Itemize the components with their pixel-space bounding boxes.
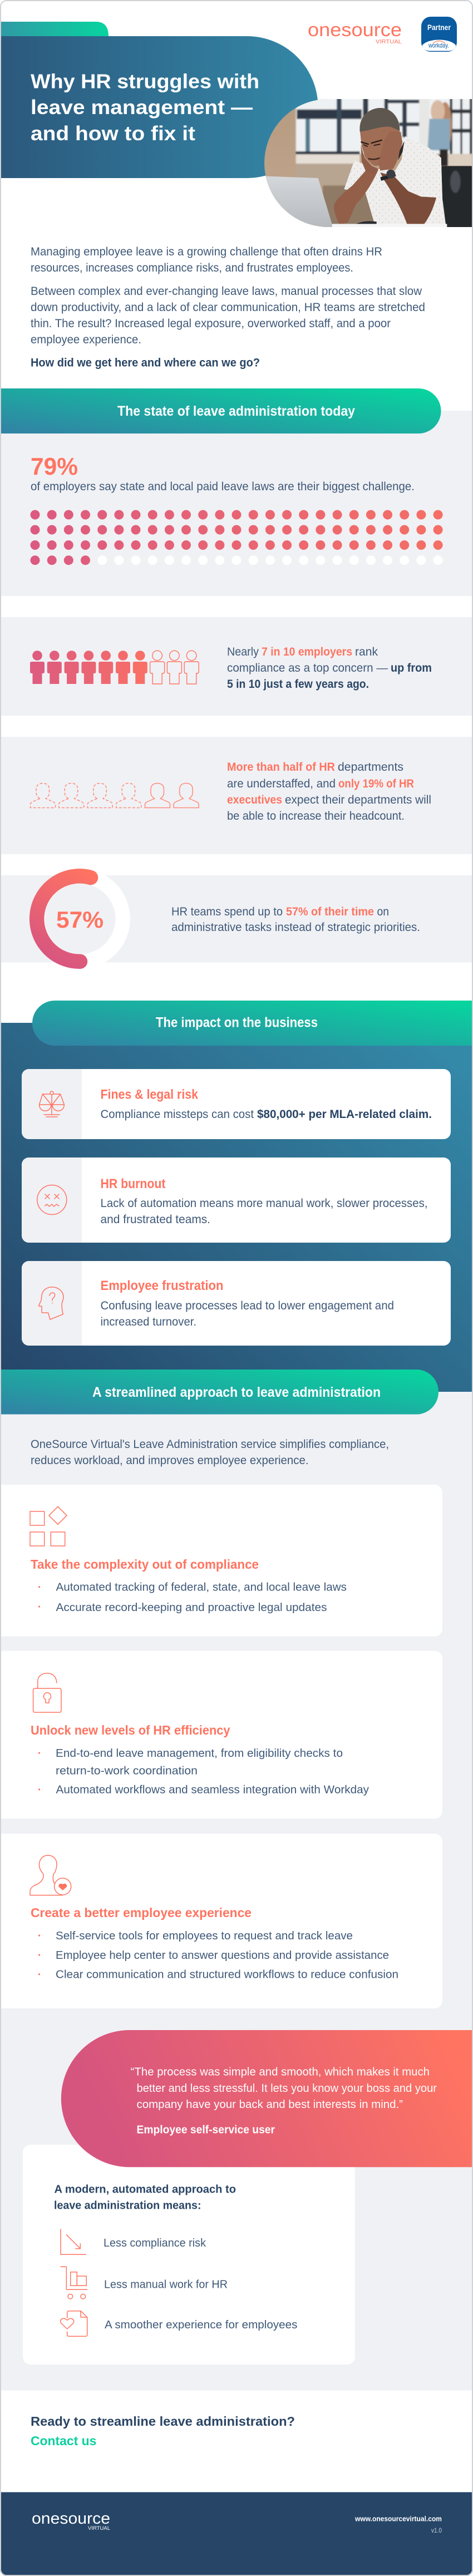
footer xyxy=(0,2492,473,2576)
banner: streamlined approach xyxy=(0,1370,438,1415)
card: unlock HR efficiency: Unlock new levels of HR efficiency xyxy=(31,1723,230,1737)
donut chart: 57%: 57% xyxy=(56,907,104,933)
bullet list: return-to-work coordination xyxy=(56,1765,198,1777)
intro text: down productivity, and a lack of clear communication, HR teams are stretched xyxy=(31,301,425,314)
intro text: How did we get here and where can we go? xyxy=(31,356,260,370)
footer logo: onesource xyxy=(32,2510,110,2528)
pictogram: 7 of 10 people xyxy=(30,651,199,684)
card: fines and legal risk: $80,000+ per MLA-related claim. xyxy=(257,1107,432,1121)
text: compliance concern: compliance as a top concern — xyxy=(227,661,388,674)
card: HR burnout: HR burnout xyxy=(100,1176,166,1191)
callout: employee quote: “The process was simple and smooth, which makes it much xyxy=(131,2066,430,2078)
banner: state of leave administration xyxy=(0,388,441,434)
text: admin time: administrative tasks instead of strategic priorities. xyxy=(171,920,420,934)
pictogram: six people outlines xyxy=(30,784,199,808)
footer url: v1.0 xyxy=(431,2526,442,2534)
card: fines and legal risk: Compliance missteps can cost xyxy=(100,1107,254,1121)
bullet list: Automated tracking of federal, state, and local leave laws xyxy=(56,1580,347,1594)
bullet list xyxy=(38,1580,347,1614)
callout: employee quote: company have your back and best interests in mind.” xyxy=(137,2099,403,2111)
icon: document with heart xyxy=(61,2311,87,2336)
icon: cart with boxes xyxy=(61,2267,87,2299)
intro text: employee experience. xyxy=(31,333,141,346)
panel: 57% admin time xyxy=(0,875,473,963)
text: compliance concern: 5 in 10 just a few years ago. xyxy=(227,677,369,691)
card: fines and legal risk: Fines & legal risk xyxy=(100,1087,199,1102)
intro text: Managing employee leave is a growing challenge that often drains HR xyxy=(31,245,382,258)
text: understaffed: expect their departments will xyxy=(285,793,431,806)
card: HR burnout xyxy=(22,1158,451,1243)
footer url xyxy=(354,2515,442,2534)
card: take the complexity out of compliance xyxy=(0,1485,442,1637)
footer url: www.onesourcevirtual.com xyxy=(354,2515,442,2523)
card: better employee experience xyxy=(0,1834,442,2008)
text: compliance concern: up from xyxy=(391,661,432,674)
bullet list: Clear communication and structured workflows to reduce confusion xyxy=(56,1968,398,1981)
intro text xyxy=(31,245,425,370)
card: HR burnout: Lack of automation means more manual work, slower processes, xyxy=(100,1196,427,1210)
title: leave management — xyxy=(31,96,253,119)
icon: person with heart xyxy=(30,1855,71,1895)
bullet list xyxy=(38,1747,369,1796)
card: fines and legal risk xyxy=(22,1069,451,1139)
header: green tab xyxy=(0,22,109,36)
text: admin time xyxy=(171,905,420,934)
bullet list: Automated workflows and seamless integration with Workday xyxy=(56,1783,369,1796)
text: compliance concern xyxy=(227,645,432,691)
panel: impact on the business xyxy=(0,1001,473,1392)
intro: leave administration service: reduces workload, and improves employee experience. xyxy=(31,1454,308,1467)
panel: understaffed HR departments xyxy=(0,737,473,854)
card: better employee experience: Create a better employee experience xyxy=(31,1905,252,1920)
bullet list: Employee help center to answer questions and provide assistance xyxy=(56,1949,389,1962)
banner: impact: The impact on the business xyxy=(156,1015,318,1031)
text: compliance concern: 7 in 10 employers xyxy=(262,645,352,658)
bullet list: Self-service tools for employees to request and track leave xyxy=(56,1929,353,1942)
text: compliance concern: rank xyxy=(355,645,378,658)
text: understaffed xyxy=(227,760,431,822)
intro text: thin. The result? Increased legal exposure, overworked staff, and a poor xyxy=(31,317,391,330)
card: employee frustration: Confusing leave processes lead to lower engagement and xyxy=(100,1299,394,1312)
icon: squares and diamond xyxy=(30,1506,67,1546)
icon: tired face xyxy=(37,1185,67,1214)
text: admin time: on xyxy=(377,905,389,918)
card: modern automated approach xyxy=(23,2145,355,2365)
text: understaffed: executives xyxy=(227,793,282,806)
heading xyxy=(54,2183,236,2211)
donut chart: 57% xyxy=(37,876,123,962)
badge: workday partner: workday. xyxy=(428,41,449,49)
icon: open padlock xyxy=(33,1673,61,1712)
icon: head with question mark xyxy=(38,1287,63,1319)
bullet list: End-to-end leave management, from eligibility checks to xyxy=(56,1747,343,1760)
call to action xyxy=(31,2414,295,2448)
dot chart: 79 of 100 xyxy=(30,510,443,565)
call to action: Contact us xyxy=(31,2434,96,2448)
logo: onesource virtual: onesource xyxy=(308,19,402,41)
banner: state of leave administration: The state of leave administration today xyxy=(117,403,355,419)
footer logo: VIRTUAL xyxy=(88,2525,110,2531)
text: understaffed: departments xyxy=(338,760,403,774)
text: understaffed: only 19% of HR xyxy=(338,777,414,790)
title xyxy=(31,70,259,145)
callout: employee quote: Employee self-service user xyxy=(137,2124,275,2136)
card: employee frustration: Employee frustration xyxy=(100,1278,224,1293)
card: modern automated approach: Less compliance risk xyxy=(104,2237,206,2249)
card: unlock HR efficiency xyxy=(0,1651,442,1819)
panel: streamlined approach xyxy=(0,1370,473,2391)
card: modern automated approach: Less manual work for HR xyxy=(104,2278,228,2291)
text: admin time: 57% of their time xyxy=(286,905,374,918)
call to action: Ready to streamline leave administration? xyxy=(31,2414,295,2429)
title: and how to fix it xyxy=(31,122,195,145)
heading: A modern, automated approach to xyxy=(55,2183,236,2196)
hero photo: stressed man at laptop xyxy=(262,95,473,232)
intro: leave administration service xyxy=(31,1437,389,1467)
card: employee frustration xyxy=(22,1261,451,1346)
icon: scales xyxy=(39,1091,64,1117)
title: Why HR struggles with xyxy=(31,70,259,92)
intro: leave administration service: OneSource Virtual's Leave Administration service simplifies compliance, xyxy=(31,1437,389,1451)
intro text: resources, increases compliance risks, and frustrates employees. xyxy=(31,261,353,274)
callout: employee quote: better and less stressful. It lets you know your boss and your xyxy=(137,2082,437,2095)
badge: workday partner: Partner xyxy=(427,23,451,32)
text: compliance concern: Nearly xyxy=(227,645,259,658)
heading: leave administration means: xyxy=(54,2199,201,2211)
stat description: of employers say state and local paid leave laws are their biggest challenge. xyxy=(31,480,415,493)
card: modern automated approach: A smoother experience for employees xyxy=(105,2318,297,2331)
callout: employee quote xyxy=(61,2030,473,2167)
text: understaffed: be able to increase their headcount. xyxy=(227,809,405,822)
text: admin time: HR teams spend up to xyxy=(171,905,283,918)
icon: declining chart xyxy=(61,2229,86,2254)
panel: 79% stat xyxy=(0,411,473,596)
text: understaffed: are understaffed, and xyxy=(227,777,336,790)
text: understaffed: More than half of HR xyxy=(227,760,335,774)
badge: workday partner xyxy=(421,17,457,52)
card: HR burnout: and frustrated teams. xyxy=(100,1213,210,1226)
banner: streamlined approach: A streamlined approach to leave administration xyxy=(92,1385,381,1400)
logo: onesource virtual: VIRTUAL xyxy=(376,39,402,45)
panel: 7 in 10 employers xyxy=(0,617,473,716)
bullet list xyxy=(38,1929,398,1981)
bullet list: Accurate record-keeping and proactive legal updates xyxy=(56,1601,327,1614)
hero panel xyxy=(0,36,318,178)
banner: impact xyxy=(32,1001,473,1046)
card: employee frustration: increased turnover. xyxy=(100,1315,196,1328)
card: take the complexity out of compliance: Take the complexity out of compliance xyxy=(31,1557,259,1572)
stat: 79%: 79% xyxy=(31,453,78,480)
intro text: Between complex and ever-changing leave laws, manual processes that slow xyxy=(31,284,422,298)
